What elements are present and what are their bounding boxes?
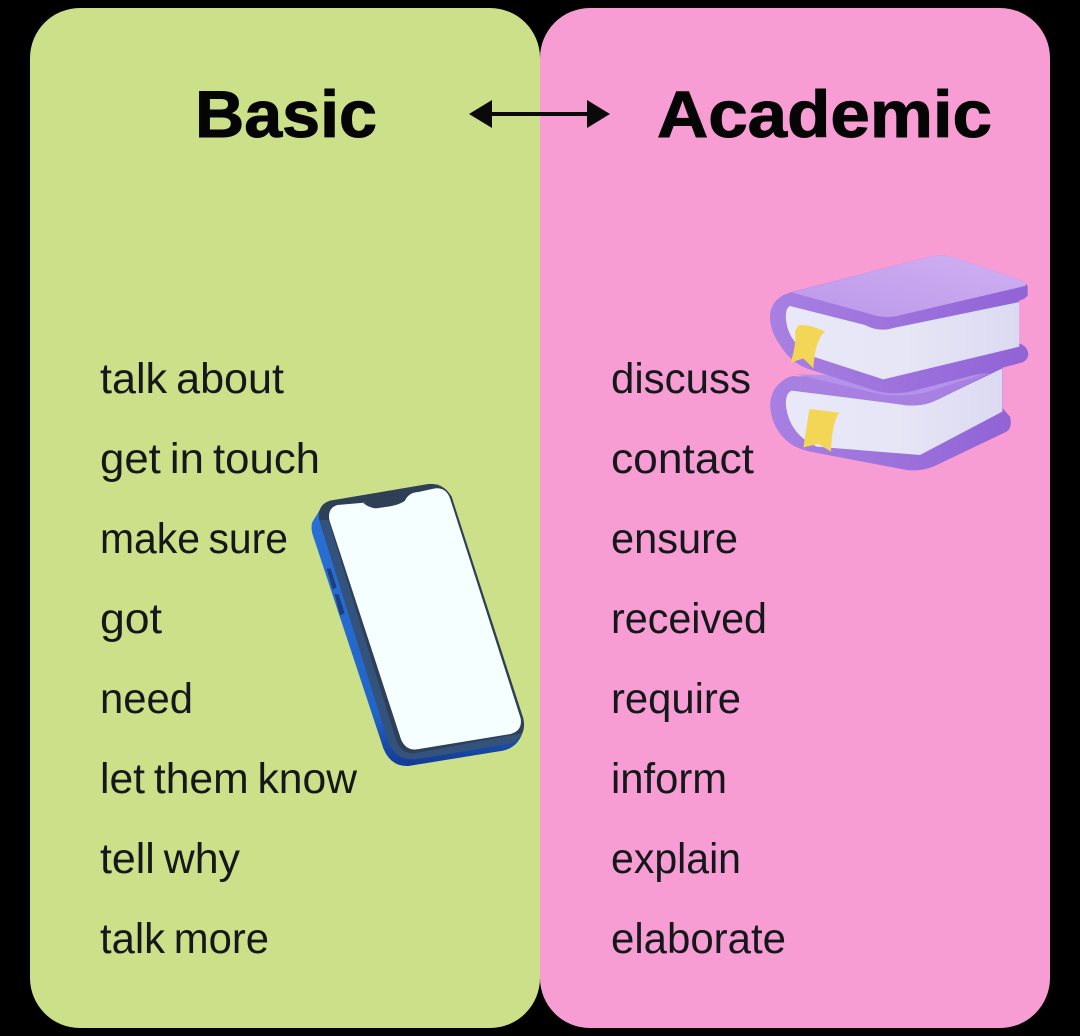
word: let them know: let them know	[100, 755, 358, 803]
upper book	[770, 256, 1028, 393]
lower bookmark	[803, 409, 839, 452]
word: explain: explain	[611, 835, 741, 883]
word: received: received	[611, 595, 767, 643]
icon: smartphone	[312, 484, 524, 766]
word: got: got	[100, 595, 162, 643]
panel: academic	[540, 8, 1050, 1028]
panel: basic	[30, 8, 540, 1028]
word: inform: inform	[611, 755, 727, 803]
word: tell why: tell why	[100, 835, 240, 883]
word: elaborate: elaborate	[611, 915, 786, 963]
word: ensure: ensure	[611, 515, 738, 563]
basic word list	[100, 355, 358, 963]
word: contact: contact	[611, 435, 754, 483]
heading: Academic: Academic	[657, 77, 992, 151]
heading: Basic: Basic	[195, 77, 377, 151]
icon: stacked books	[770, 256, 1028, 470]
panel background: pink	[540, 8, 1050, 1028]
arrow: double-headed	[469, 100, 610, 128]
word: discuss: discuss	[611, 355, 751, 403]
word: talk more: talk more	[100, 915, 269, 963]
upper bookmark	[791, 325, 825, 368]
word: get in touch: get in touch	[100, 435, 320, 483]
lower book	[770, 367, 1011, 470]
word: need: need	[100, 675, 193, 723]
academic word list	[611, 355, 786, 963]
word: require: require	[611, 675, 741, 723]
word: make sure: make sure	[100, 515, 288, 563]
panel background: green	[30, 8, 540, 1028]
word: talk about: talk about	[100, 355, 284, 403]
